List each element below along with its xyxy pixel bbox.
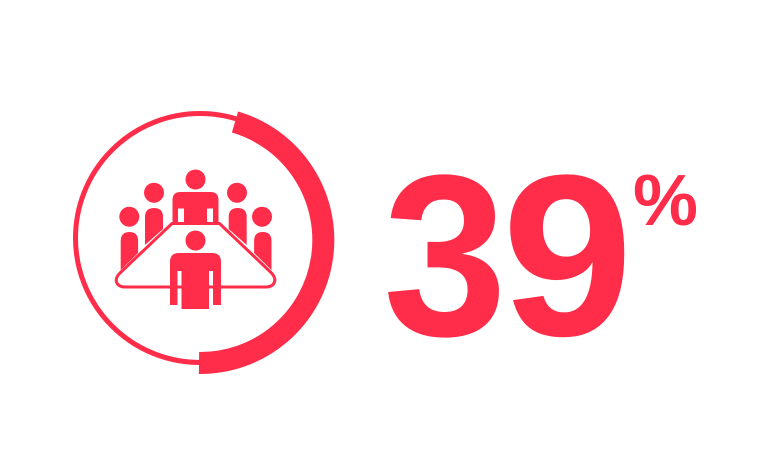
percent sign: % [633, 161, 698, 241]
big number: 3 [383, 127, 507, 384]
right outer person [252, 207, 272, 270]
big number: 9 [502, 127, 633, 384]
table [116, 224, 275, 287]
progress ring [76, 114, 324, 363]
icon: people around a meeting table [116, 170, 275, 309]
back centre person [172, 170, 218, 226]
right inner person [227, 183, 247, 245]
left outer person [119, 207, 139, 270]
front centre person [170, 230, 221, 309]
left inner person [144, 183, 164, 245]
big number [383, 127, 633, 384]
